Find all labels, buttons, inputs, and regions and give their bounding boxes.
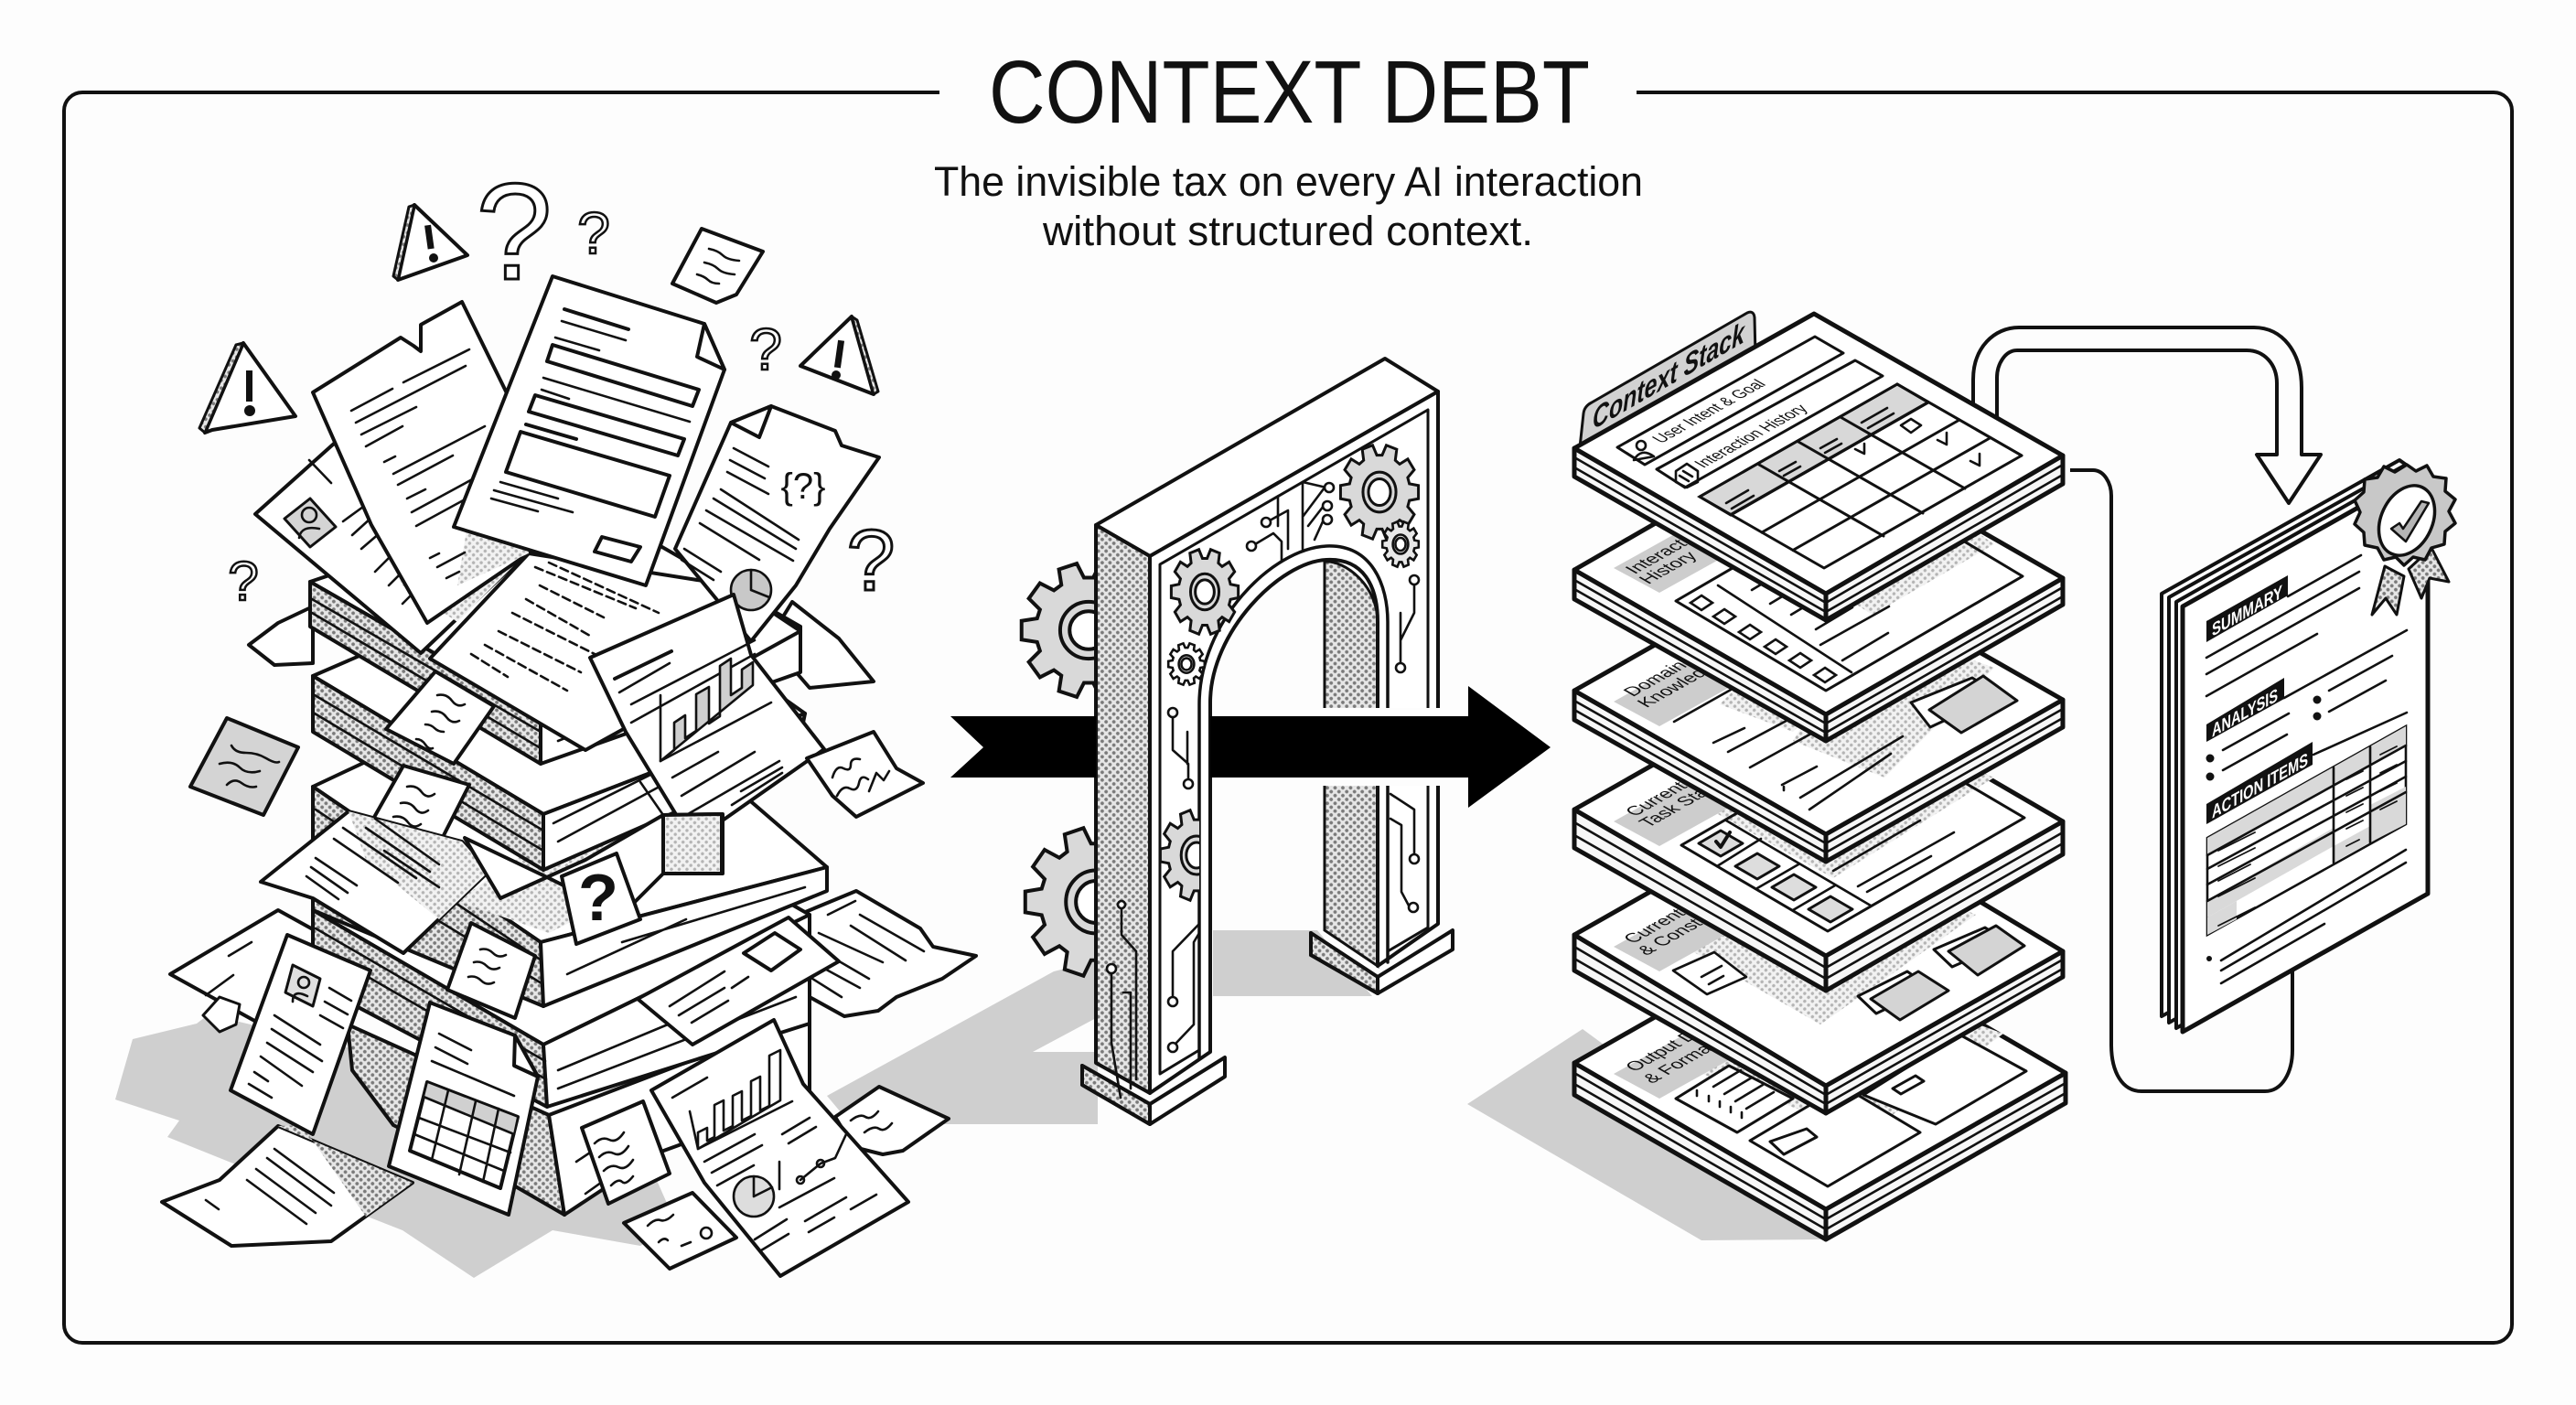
small note bottom	[624, 1193, 736, 1269]
analysis label: ANALYSIS	[2212, 684, 2278, 742]
layer 2: interaction history: History	[1635, 549, 1702, 587]
row: user intent and goal: User Intent & Goal	[1648, 377, 1770, 446]
icon: warning triangle top	[393, 205, 467, 280]
action items label: ACTION ITEMS	[2212, 749, 2308, 823]
subtitle: without structured context.	[1042, 208, 1533, 254]
icon: warning triangle right	[800, 316, 878, 394]
layer 6: output design	[1574, 927, 2066, 1239]
sticky note top	[672, 229, 763, 303]
subtitle: The invisible tax on every AI interaction	[934, 158, 1643, 205]
curled sheet bottom left	[162, 1125, 413, 1246]
document with rectangle	[638, 917, 839, 1045]
action items table	[2207, 726, 2406, 935]
layer 1: context stack top plate	[1574, 312, 2063, 620]
context stack tab: Context Stack	[1593, 314, 1746, 436]
base halftone	[1082, 933, 1378, 1124]
small note centre	[447, 923, 535, 1018]
big chart sheet	[651, 1020, 908, 1276]
layer 4: current task state: Current Task	[1621, 758, 1730, 820]
note on block	[386, 671, 494, 764]
portrait sheet	[231, 935, 370, 1134]
floating warning triangles	[199, 205, 878, 433]
layer 4: current task state: Task State	[1635, 778, 1727, 831]
row: user intent and goal	[1617, 337, 1843, 465]
lower connector line	[2070, 470, 2292, 1091]
layer 3: domain knowledge: Knowledge	[1633, 656, 1730, 711]
summary label	[2206, 575, 2288, 642]
question mark card: ?	[578, 862, 618, 935]
form document	[454, 276, 724, 585]
paper under question card	[465, 782, 723, 915]
arch front face	[1150, 391, 1438, 1093]
stacked block: upper	[313, 558, 805, 870]
chart report	[590, 595, 824, 842]
document text lines	[2206, 555, 2407, 983]
layer 5: current state	[1574, 800, 2063, 1113]
torn paper mid left	[261, 811, 488, 953]
floating question marks: ?	[847, 512, 895, 609]
floating question marks: ?	[476, 155, 553, 308]
front pillar base	[1082, 1057, 1225, 1124]
layer 2: interaction history: Interaction	[1621, 525, 1713, 577]
back pages	[2162, 460, 2424, 1028]
pile of messy documents	[162, 155, 976, 1276]
gateway arch	[1022, 359, 1453, 1124]
layer 5: current state: & Constraints	[1633, 895, 1746, 959]
layer 3: domain knowledge: Domain	[1619, 659, 1691, 700]
layer 6: output design: & Format	[1638, 1039, 1722, 1087]
ribbon seal with check	[2355, 465, 2455, 615]
arch inner panel outlines	[1160, 410, 1428, 1074]
torn report with braces: {?}	[781, 467, 825, 507]
summary label: SUMMARY	[2212, 581, 2282, 641]
small note right	[835, 1087, 949, 1154]
face gears	[1160, 445, 1419, 900]
subtitle	[934, 158, 1643, 254]
code sheet on top of the pile	[430, 553, 800, 750]
final structured document	[2162, 460, 2455, 1032]
grey sticky note	[190, 718, 298, 815]
arch top face	[1096, 359, 1438, 556]
paper with photo	[255, 444, 526, 653]
signed note right	[807, 732, 923, 817]
floating question marks: ?	[749, 316, 782, 382]
table sheet	[389, 1003, 538, 1215]
circuit traces	[1107, 482, 1419, 1098]
back gears	[1022, 563, 1166, 976]
small note lower	[582, 1101, 670, 1204]
floating question marks: ?	[228, 551, 259, 612]
action items label	[2206, 742, 2313, 824]
floating question marks: ?	[577, 200, 610, 266]
back pillar base	[1311, 930, 1453, 993]
layer 4: current task state	[1574, 675, 2063, 991]
context stack tab	[1580, 312, 1755, 448]
layer 2: interaction history	[1574, 434, 2063, 741]
torn sheets behind the pile	[170, 602, 976, 1032]
front page	[2183, 468, 2428, 1032]
inner arch face	[1325, 562, 1378, 966]
outlined arrow to final document	[1973, 327, 2321, 503]
context stack	[1574, 312, 2066, 1239]
small note	[369, 766, 469, 852]
layer 6: output design: Output Design	[1621, 1007, 1741, 1075]
torn report with braces	[675, 406, 879, 641]
black flow arrow	[950, 686, 1551, 808]
stacked block: lower	[313, 787, 810, 1107]
icon: warning triangle left	[199, 343, 295, 433]
layer 5: current state: Current State	[1619, 883, 1732, 947]
row: interaction history	[1657, 360, 1883, 488]
torn letter	[313, 302, 529, 623]
stacked block: top	[310, 494, 800, 764]
row: interaction history: Interaction History	[1690, 402, 1813, 471]
base block	[348, 1015, 810, 1215]
ground shadows	[115, 930, 1826, 1278]
checklist table	[1700, 384, 2022, 568]
title: CONTEXT DEBT	[989, 42, 1590, 142]
stacked block: middle with white plate	[313, 659, 827, 1006]
floating question marks	[228, 155, 895, 612]
question mark card	[562, 853, 640, 944]
layer 3: domain knowledge	[1574, 556, 2063, 862]
arch left side	[1096, 525, 1150, 1093]
analysis label	[2206, 678, 2284, 742]
